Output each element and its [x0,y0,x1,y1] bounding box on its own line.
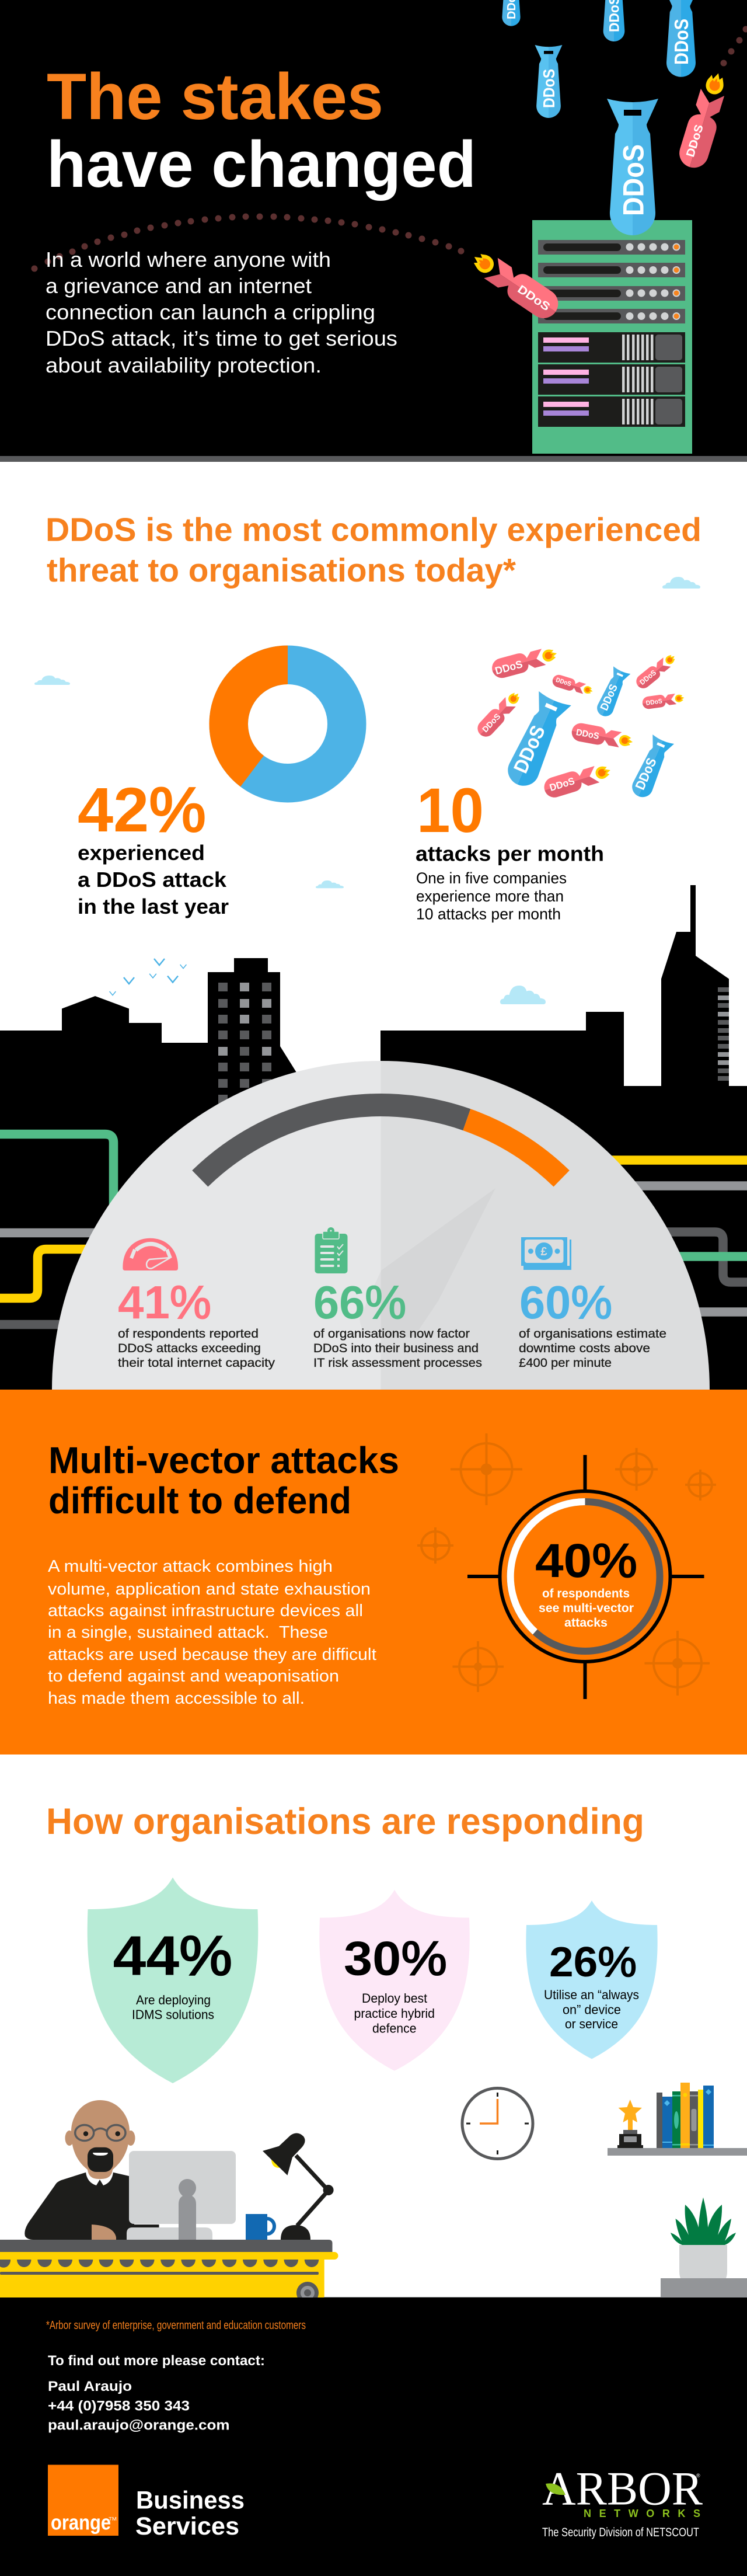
logo: arbor networks: NETWORKS [584,2508,700,2519]
heading: how organisations are responding: How organisations are responding [46,1801,644,1842]
heading: most commonly experienced threat: DDoS is the most commonly experienced [46,511,701,549]
multi-vector description: volume, application and state exhaustion [48,1580,371,1599]
heading: most commonly experienced threat: threat to organisations today* [47,552,516,589]
illustration: man at desk [0,2100,338,2304]
icon: small blue bomb [594,666,630,719]
stat: 60% [519,1237,666,1370]
monitor [129,2151,236,2224]
ears [65,2131,135,2146]
coloured pipes [0,1134,747,1324]
eyes [83,2131,120,2136]
shield: 26% [526,1900,658,2059]
birds [110,959,186,995]
icon: red bomb upper right: DDoS [638,669,658,687]
icon: speedometer [123,1238,178,1270]
multi-vector description: attacks are used because they are difficult [48,1645,376,1664]
icon: red bomb right: DDoS [645,698,663,707]
intro text: connection can launch a crippling [46,300,375,324]
target chart: 40% [467,1455,704,1699]
shield: 30%: Deploy best [362,1991,427,2006]
stat: 41% [118,1238,275,1370]
desk [0,2240,338,2304]
icon: banknote [521,1237,571,1270]
contact details: paul.araujo@orange.com [48,2418,230,2434]
icon: small blue bomb: DDoS [598,683,620,712]
multi-vector description [48,1557,376,1708]
panel: footer [0,2297,747,2576]
icon: medium blue bomb [535,45,562,118]
shield: 26%: on” device [563,2003,621,2017]
cloud [500,986,546,1004]
panel: gauge dome [52,1061,710,1390]
heading: multi-vector [48,1439,399,1522]
stat: 60%: 60% [519,1276,612,1328]
logo: orange: orange [51,2511,111,2534]
icon: red bomb bottom [542,760,613,800]
icon: red bomb small centre [551,673,595,697]
shield: 26%: or service [565,2017,618,2031]
business services: Services [135,2512,239,2540]
illustration: shelf with trophy and books [608,2083,747,2156]
glasses [75,2125,125,2140]
icon: top left bomb [501,0,522,26]
stat: 66%: IT risk assessment processes [313,1356,482,1370]
illustration: potted plant [661,2198,747,2297]
beard [88,2147,113,2172]
stat: 10 attacks per month: experience more than [416,887,564,905]
panel: hero [0,0,747,462]
icon: right blue bomb [628,734,674,801]
title: have changed [47,128,476,201]
logo: orange: TM [109,2516,117,2522]
icon: red bomb middle: DDoS [575,727,600,742]
intro text: In a world where anyone with [46,248,331,271]
shield: 30%: defence [372,2021,417,2036]
hand [92,2225,116,2240]
faint crosshairs [417,1433,716,1696]
icon: large blue bomb: DDoS [617,144,650,216]
intro text [46,248,397,377]
icon: red bomb upper right [676,69,732,171]
stat: 10 attacks per month: 10 attacks per month [416,905,561,923]
stat: 42% experienced: a DDoS attack [78,868,227,892]
contact details: Paul Araujo [48,2379,132,2394]
server rack [532,220,692,454]
stat: 41%: their total internet capacity [118,1356,275,1370]
contact details: +44 (0)7958 350 343 [48,2399,190,2414]
icon: right blue bomb: DDoS [632,756,659,792]
illustration: cluster of bombs [474,644,685,801]
icon: red bomb left: DDoS [480,712,502,734]
shield: 26%: 26% [549,1939,637,1986]
shield: 44%: Are deploying [136,1993,211,2007]
logo: orange [48,2465,118,2536]
mug [246,2214,274,2240]
icon: trophy [617,2100,643,2148]
stat: 10 attacks per month: One in five companies [416,869,567,887]
stat: 10 attacks per month: attacks per month [416,842,604,865]
gauge needle [359,1188,495,1338]
intro text: DDoS attack, it’s time to get serious [46,326,397,350]
icon: banknote: £ [540,1245,547,1258]
right buildings [381,885,747,1390]
stat: 66%: of organisations now factor [313,1327,470,1341]
business services [135,2487,245,2540]
icon: red bomb hitting the rack [466,245,564,324]
title [47,60,476,201]
stat: 41%: 41% [118,1276,211,1328]
donut chart: 42% [209,646,347,786]
building windows [218,983,729,1103]
contact details: To find out more please contact: [48,2353,265,2369]
cloud [34,676,70,685]
intro text: about availability protection. [46,353,322,377]
multi-vector description: in a single, sustained attack. These [48,1623,328,1642]
icon: big blue bomb: DDoS [509,722,550,777]
stat: 42% experienced: experienced [78,841,205,865]
stat: 60%: of organisations estimate [519,1327,666,1341]
sweater [25,2173,159,2240]
cloud [316,880,344,888]
shield: 30%: practice hybrid [354,2006,435,2021]
multi-vector description: attacks against infrastructure devices all [48,1602,363,1620]
intro text: a grievance and an internet [46,274,312,298]
icon: red bomb right [641,691,685,710]
stat: 42% experienced: in the last year [78,894,229,918]
stat: 10 attacks per month: 10 [417,775,484,845]
illustration: city skyline [0,885,747,1390]
icon: top middle bomb [602,0,626,41]
shield: 44%: IDMS solutions [132,2007,214,2022]
icon: red bomb small centre: DDoS [555,677,572,688]
logo: arbor networks: ARBOR [542,2462,703,2515]
stat: 60%: downtime costs above [519,1341,650,1355]
target chart: 40%: see multi-vector [539,1602,634,1615]
icon: red bomb upper right: DDoS [684,123,706,159]
target chart: 40%: 40% [535,1534,637,1588]
heading: multi-vector: difficult to defend [48,1480,351,1522]
title: The stakes [47,60,383,133]
icon: red bomb top [490,644,559,680]
multi-vector description: has made them accessible to all. [48,1689,305,1708]
stat: 42% experienced: 42% [78,774,206,845]
collar [86,2172,113,2185]
shield: 44%: 44% [113,1924,232,1987]
icon: red bomb top: DDoS [494,658,524,677]
dotted trail of flying bombs [32,26,747,272]
monitor stand [179,2179,196,2240]
icon: books [657,2083,714,2148]
panel: multi-vector attacks [0,1390,747,1755]
face [71,2100,130,2179]
shield: 30% [319,1890,470,2071]
stat: 66%: DDoS into their business and [313,1341,479,1355]
gauge arc [200,1105,561,1179]
shield: 44% [88,1878,258,2083]
heading: multi-vector: Multi-vector attacks [48,1439,399,1481]
multi-vector description: A multi-vector attack combines high [48,1557,333,1576]
icon: top right bomb [665,0,697,77]
icon: big blue bomb [501,691,571,792]
logo: arbor networks [542,2462,703,2539]
icon: red bomb middle [570,722,634,751]
multi-vector description: to defend against and weaponisation [48,1667,339,1686]
heading: most commonly experienced threat [46,511,701,589]
lamp [263,2133,334,2240]
stat: 10 attacks per month [416,775,604,923]
logo: arbor networks: ® [696,2473,700,2478]
cloud [662,577,700,589]
icon: medium blue bomb: DDoS [540,69,558,108]
keyboard [127,2227,212,2240]
icon: red bomb upper right [633,650,679,691]
icon: clipboard [315,1227,348,1273]
icon: red bomb left [474,688,525,740]
icon: red bomb bottom: DDoS [548,775,576,793]
shield: 30%: 30% [344,1931,447,1985]
stat: 66% [313,1227,482,1370]
stat: 41%: DDoS attacks exceeding [118,1341,261,1355]
logo: arbor networks: The Security Division of NETSCOUT [542,2526,699,2539]
icon: top right bomb: DDoS [671,19,692,65]
icon: large blue bomb [607,99,658,235]
stat: 41%: of respondents reported [118,1327,259,1341]
contact details [48,2353,265,2434]
target chart: 40%: attacks [564,1616,608,1630]
icon: wall clock [462,2088,533,2159]
target chart: 40%: of respondents [542,1587,630,1600]
icon: red bomb hitting the rack: DDoS [515,283,552,314]
footnote: *Arbor survey of enterprise, government and education customers [46,2319,306,2332]
stat: 60%: £400 per minute [519,1356,612,1370]
left buildings [0,958,350,1390]
business services: Business [136,2487,245,2515]
stat: 66%: 66% [313,1276,406,1328]
stat: 42% experienced [78,774,229,918]
shield: 26%: Utilise an “always [544,1987,639,2002]
